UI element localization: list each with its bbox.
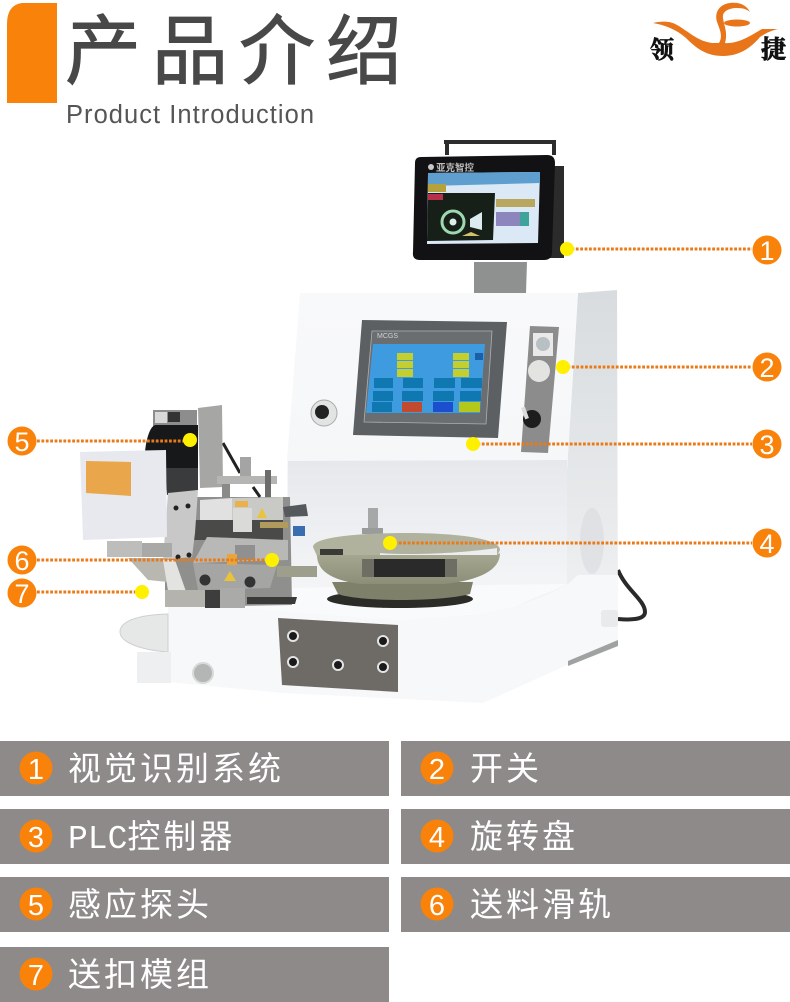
header accent block — [7, 3, 57, 103]
control strip — [521, 326, 559, 453]
legend bar 6: 送料滑轨 — [470, 887, 614, 926]
legend bar 2: 2 — [429, 754, 445, 786]
legend bar 3: PLC控制器 — [68, 819, 235, 858]
callout 4 — [383, 528, 782, 559]
legend bar 1: 1 — [28, 754, 44, 786]
callout 7 — [8, 578, 149, 609]
rotary bowl feeder — [313, 508, 500, 608]
legend bar 5 — [0, 877, 389, 932]
legend bar 2 — [401, 741, 790, 796]
actuator mechanism — [107, 405, 317, 608]
base knob — [193, 663, 213, 683]
legend bar 5: 5 — [28, 890, 44, 922]
callout 5: 5 — [14, 427, 30, 457]
legend bar 3 — [0, 809, 389, 864]
power cable — [618, 570, 645, 619]
round switch — [311, 400, 337, 426]
side tray — [120, 614, 171, 683]
logo: 捷 — [761, 30, 786, 66]
legend bar 1 — [0, 741, 389, 796]
legend bar 2: 开关 — [470, 751, 542, 790]
callout 5 — [8, 426, 197, 457]
legend bar 5: 感应探头 — [68, 887, 212, 926]
housing right side panel — [480, 290, 618, 702]
callout 1: 1 — [759, 236, 775, 266]
callout 7: 7 — [14, 579, 30, 609]
callout 2 — [556, 352, 782, 383]
cable gland — [601, 610, 618, 627]
legend bar 3: 3 — [28, 822, 44, 854]
callout 6 — [8, 546, 279, 576]
legend bar 7 — [0, 947, 389, 1002]
connector plate — [278, 618, 398, 692]
logo — [650, 3, 786, 66]
subtitle: Product Introduction — [66, 101, 314, 129]
base front — [168, 575, 618, 703]
legend bar 4: 旋转盘 — [470, 819, 578, 858]
legend bar 4: 4 — [429, 822, 445, 854]
nameplate strip — [568, 640, 618, 666]
legend bar 7: 送扣模组 — [68, 957, 212, 996]
machine illustration — [80, 140, 645, 703]
callout 2: 2 — [759, 353, 775, 383]
legend bar 7: 7 — [28, 960, 44, 992]
legend bar 6: 6 — [429, 890, 445, 922]
callout 3 — [466, 430, 782, 460]
vision monitor — [413, 140, 564, 260]
monitor stand — [474, 262, 527, 293]
callout 1 — [560, 236, 782, 266]
callout 3: 3 — [759, 430, 775, 460]
speaker grille — [580, 508, 604, 574]
logo: 领 — [650, 30, 676, 65]
touch panel — [353, 320, 507, 438]
warning box — [80, 450, 167, 540]
callout 6: 6 — [14, 546, 30, 576]
touch panel: MCGS — [377, 333, 398, 340]
base deck — [168, 584, 567, 620]
housing upper front face — [287, 293, 578, 590]
vision monitor: 亚克智控 — [436, 160, 475, 174]
callout 4: 4 — [759, 529, 775, 559]
housing recessed lower face — [288, 460, 567, 590]
legend bar 6 — [401, 877, 790, 932]
legend bar 1: 视觉识别系统 — [68, 751, 284, 790]
legend bar 4 — [401, 809, 790, 864]
